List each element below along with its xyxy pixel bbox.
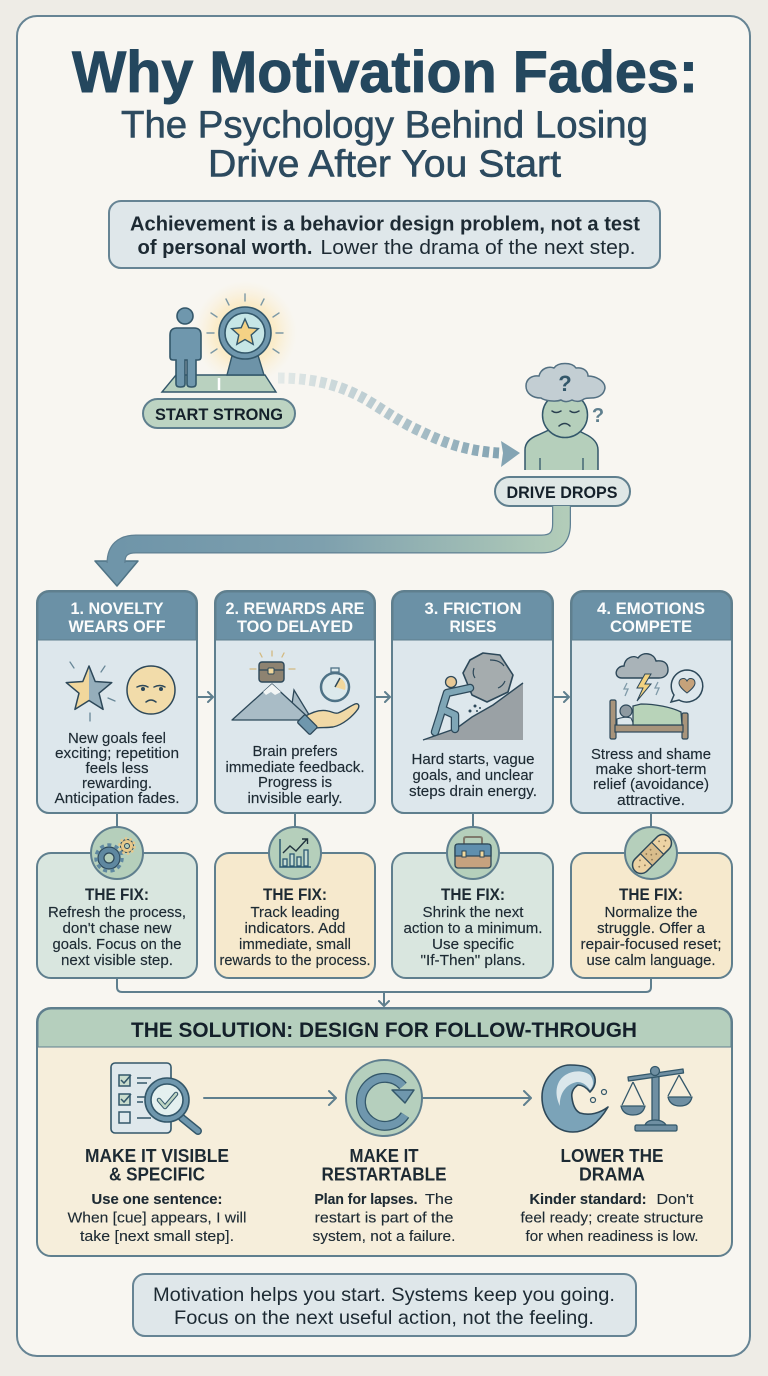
panel: fix 2 [215,827,375,978]
fix text: THE FIX: [263,886,327,904]
icon: storm cloud, heart bubble and person in bed [610,654,703,739]
heading text: 4. EMOTIONS [597,599,705,618]
icon: tired person under cloud [525,364,605,470]
column: make it visible and specific: MAKE IT VISIBLE [85,1146,229,1166]
solution heading: THE SOLUTION: DESIGN FOR FOLLOW-THROUGH [131,1019,637,1042]
callout: key message: of personal worth. [138,237,312,259]
body text: Anticipation fades. [54,790,180,807]
heading text: RISES [450,617,496,636]
icon: rising chart [269,827,321,879]
fix text [220,886,370,969]
heading text: WEARS OFF [68,617,166,636]
column: make it restartable: restart is part of the [314,1210,454,1226]
label: start strong: START STRONG [155,405,283,424]
connectors from causes to fixes [117,813,651,829]
fix text: repair-focused reset; [580,936,722,953]
fix text: Track leading [250,904,340,921]
column: make it visible and specific: Use one sentence: [92,1192,222,1208]
heading text [68,599,166,636]
fix text: THE FIX: [85,886,149,904]
column: make it restartable: RESTARTABLE [322,1164,446,1184]
callout: key message: Lower the drama of the next step. [320,237,636,259]
icon: toolbox [447,827,499,879]
icon: restart loop [346,1060,422,1136]
callout: closing message: Focus on the next useful action, not the feeling. [174,1307,594,1329]
label: drive drops: DRIVE DROPS [506,483,618,502]
arrow: big bent arrow to the causes row [95,506,562,586]
callout: closing message [133,1274,636,1336]
fix text: struggle. Offer a [597,920,706,937]
panel: cause 3 friction [392,591,553,813]
column: make it visible and specific [68,1146,246,1245]
heading text: 2. REWARDS ARE [226,599,364,618]
body text: invisible early. [248,790,342,807]
column: make it restartable: The [425,1192,453,1208]
fix text [404,886,542,969]
body text: steps drain energy. [409,783,537,800]
icon: person pushing boulder uphill [423,653,523,740]
body text [226,743,364,807]
icon: gears [91,827,143,879]
column: make it visible and specific: & SPECIFIC [109,1164,205,1184]
panel: fix 3 [392,827,553,978]
heading text: 3. FRICTION [424,599,522,618]
column: make it restartable: MAKE IT [350,1146,418,1166]
fix text: action to a minimum. [404,920,542,937]
body text: feels less [86,760,148,777]
fix text: immediate, small [239,936,351,953]
callout: key message: Achievement is a behavior design problem, not a test [130,214,640,236]
title [72,40,698,186]
body text: goals, and unclear [412,767,534,784]
body text [591,746,711,809]
body text [54,730,180,807]
column: make it visible and specific: When [cue] appears, I will [68,1210,246,1226]
column: make it restartable [312,1146,456,1245]
icon: treasure on mountain, stopwatch, open hand [232,651,359,735]
arrow: visible to restartable [204,1091,336,1105]
panel: the solution [37,1008,732,1256]
icon: tired person under cloud: ? [592,405,604,427]
label: start strong [143,399,295,428]
fix text: Refresh the process, [48,904,186,921]
fix text: THE FIX: [619,886,683,904]
title: The Psychology Behind Losing [121,104,648,146]
body text: New goals feel [68,730,166,747]
connectors between cause cards [198,692,569,702]
column: make it restartable: system, not a failure. [312,1229,456,1245]
body text: rewarding. [82,775,152,792]
column: lower the drama [520,1146,704,1245]
icon: person with glowing star goal [162,281,297,392]
callout: key message [109,201,660,268]
fix text: goals. Focus on the [52,936,182,953]
fix text: rewards to the process. [220,952,370,969]
panel: fix 4 [571,827,732,978]
fix text [48,886,186,969]
heading text: TOO DELAYED [237,617,353,636]
column: make it restartable: Plan for lapses. [314,1192,418,1208]
icon: checklist with magnifier [111,1063,198,1133]
column: lower the drama: DRAMA [579,1164,645,1184]
fix text: "If-Then" plans. [420,952,526,969]
body text: Brain prefers [252,743,338,760]
heading text [424,599,522,636]
body text: relief (avoidance) [593,776,709,793]
label: drive drops [495,477,630,506]
solution header [38,1009,731,1047]
column: make it visible and specific: take [next small step]. [80,1229,234,1245]
body text: immediate feedback. [226,759,364,776]
icon: bandage [625,827,677,879]
fix text: Normalize the [604,904,698,921]
heading text [226,599,364,636]
fix text: Shrink the next [422,904,524,921]
panel: cause 4 emotions [571,591,732,813]
header [393,592,552,640]
column: lower the drama: LOWER THE [560,1146,664,1166]
title: Drive After You Start [208,144,561,186]
column: lower the drama: Don't [656,1192,694,1208]
heading text: 1. NOVELTY [70,599,164,618]
callout: closing message: Motivation helps you start. Systems keep you going. [153,1284,615,1306]
fix text: don't chase new [62,920,172,937]
fix text: THE FIX: [441,886,505,904]
arrow: dashed curve from start to drive drops [278,378,520,467]
title: Why Motivation Fades: [72,40,698,105]
connector: fixes merging into solution [117,978,651,1006]
fix text: Use specific [432,936,515,953]
fix text: indicators. Add [244,920,346,937]
fix text [580,886,722,969]
panel: cause 2 delayed rewards [215,591,375,813]
body text: exciting; repetition [55,745,179,762]
panel: fix 1 [37,827,197,978]
icon: wave and balance scale [542,1065,692,1132]
icon: tired person under cloud: ? [558,371,572,396]
header [216,592,374,640]
header [572,592,731,640]
body text: Progress is [258,774,332,791]
icon: half faded star and bored face [66,662,175,721]
body text: attractive. [617,792,685,809]
column: lower the drama: feel ready; create structure [520,1210,704,1226]
fix text: use calm language. [586,952,716,969]
body text: Stress and shame [591,746,711,763]
body text: make short-term [596,761,706,778]
fix text: next visible step. [61,952,173,969]
panel: cause 1 novelty [37,591,197,813]
body text [409,751,537,800]
body text: Hard starts, vague [412,751,534,768]
heading text [597,599,705,636]
header [38,592,196,640]
heading text: COMPETE [610,617,692,636]
arrow: restartable to lower the drama [422,1091,531,1105]
column: lower the drama: for when readiness is low. [526,1229,698,1245]
column: lower the drama: Kinder standard: [530,1192,646,1208]
